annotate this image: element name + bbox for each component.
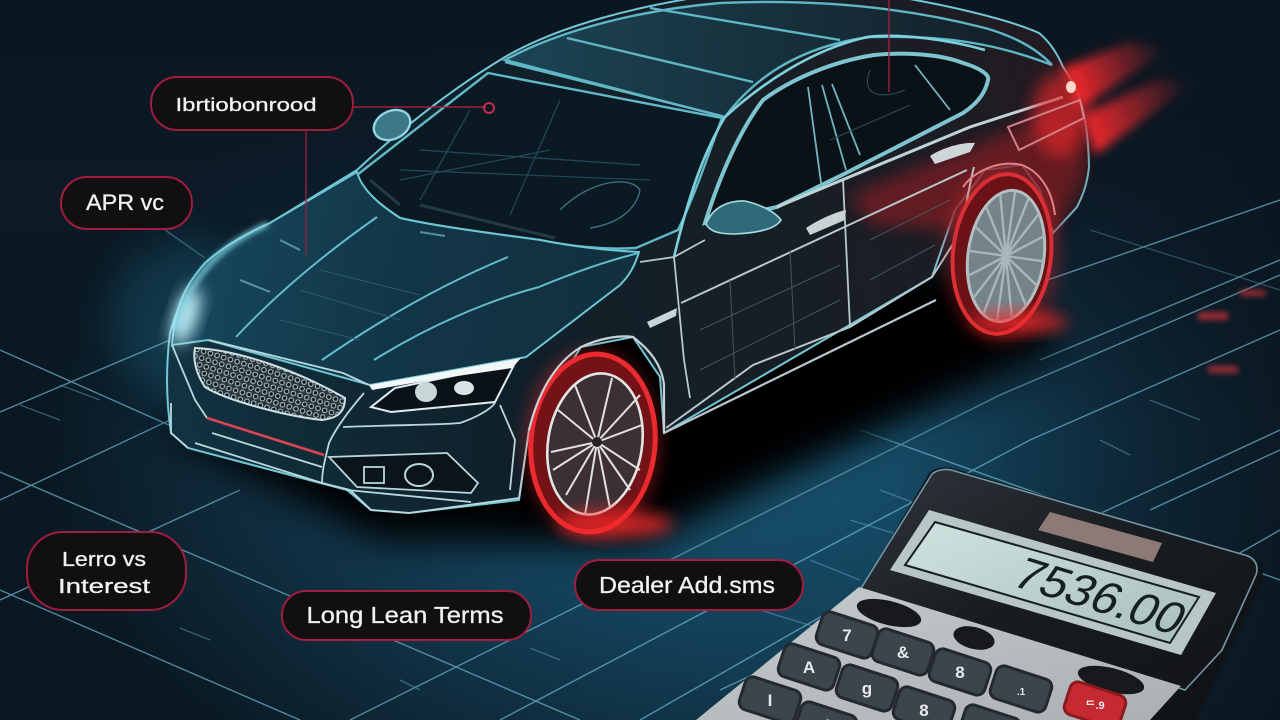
red rear light streaks (1062, 42, 1195, 155)
key legends: ᄃ.9 (1085, 699, 1105, 712)
label: Dealer Add.sms (575, 560, 803, 610)
label: APR vc: APR vc (86, 190, 164, 215)
headlight (369, 358, 521, 412)
label: Lerro vs Interest: Interest (58, 576, 151, 598)
red bumper accent (207, 418, 324, 455)
door panels (640, 97, 1063, 433)
door handle front (806, 210, 846, 235)
side window (705, 54, 988, 223)
red floor marks (1198, 290, 1265, 373)
side mirror (706, 201, 781, 234)
calculator (696, 467, 1263, 720)
red ground glow front (557, 511, 673, 537)
label: Long Lean Terms: Long Lean Terms (306, 602, 504, 628)
car (166, 0, 1195, 537)
key legends: I (768, 691, 772, 710)
front wheel (523, 336, 664, 537)
key legends: .1 (1017, 687, 1026, 698)
label: Lerro vs Interest: Lerro vs (62, 549, 146, 571)
cyan headlamp glow (166, 284, 206, 348)
display frame (890, 510, 1216, 655)
solar panel (1038, 512, 1162, 562)
keypad plate (696, 587, 1181, 720)
key legends: A (803, 658, 815, 677)
label: Lerro vs Interest (27, 532, 186, 610)
car body silhouette (167, 0, 1089, 513)
windshield (357, 73, 722, 249)
label: Ibrtiobonrood: Ibrtiobonrood (176, 95, 316, 115)
key legends: 8 (955, 663, 965, 682)
ground shadow under car (160, 260, 1060, 545)
key legends: & (897, 643, 909, 662)
rear wheel (944, 164, 1060, 343)
front grille (194, 348, 345, 420)
small black switches (854, 593, 1147, 700)
roof strip lines (505, 8, 840, 116)
key legends: 7 (842, 626, 852, 645)
LCD screen (905, 522, 1199, 643)
red ground glow rear (972, 312, 1068, 332)
calculator top panel (860, 469, 1257, 690)
hood (172, 172, 639, 385)
label: Long Lean Terms (282, 591, 531, 640)
connector lines (165, 0, 889, 258)
label: APR vc (61, 177, 192, 229)
calculator body (696, 467, 1263, 720)
lower bumper (171, 340, 529, 513)
small chrome accent (647, 308, 677, 328)
left fender highlight (176, 224, 268, 330)
roof panel (505, 2, 1052, 117)
far side mirror (369, 104, 415, 146)
window frame outer (674, 36, 985, 257)
blueprint grid floor (0, 200, 1280, 720)
tail light (1008, 73, 1088, 157)
display reading: 7536.00 (1005, 548, 1196, 644)
keys (737, 610, 1128, 720)
door handle rear (930, 143, 975, 164)
key legends (768, 626, 1105, 720)
rear red side wash (850, 105, 1085, 240)
key legends: 8 (919, 701, 929, 720)
label: Dealer Add.sms: Dealer Add.sms (599, 572, 775, 598)
label: Ibrtiobonrood (151, 77, 353, 130)
key legends: g (862, 679, 872, 698)
